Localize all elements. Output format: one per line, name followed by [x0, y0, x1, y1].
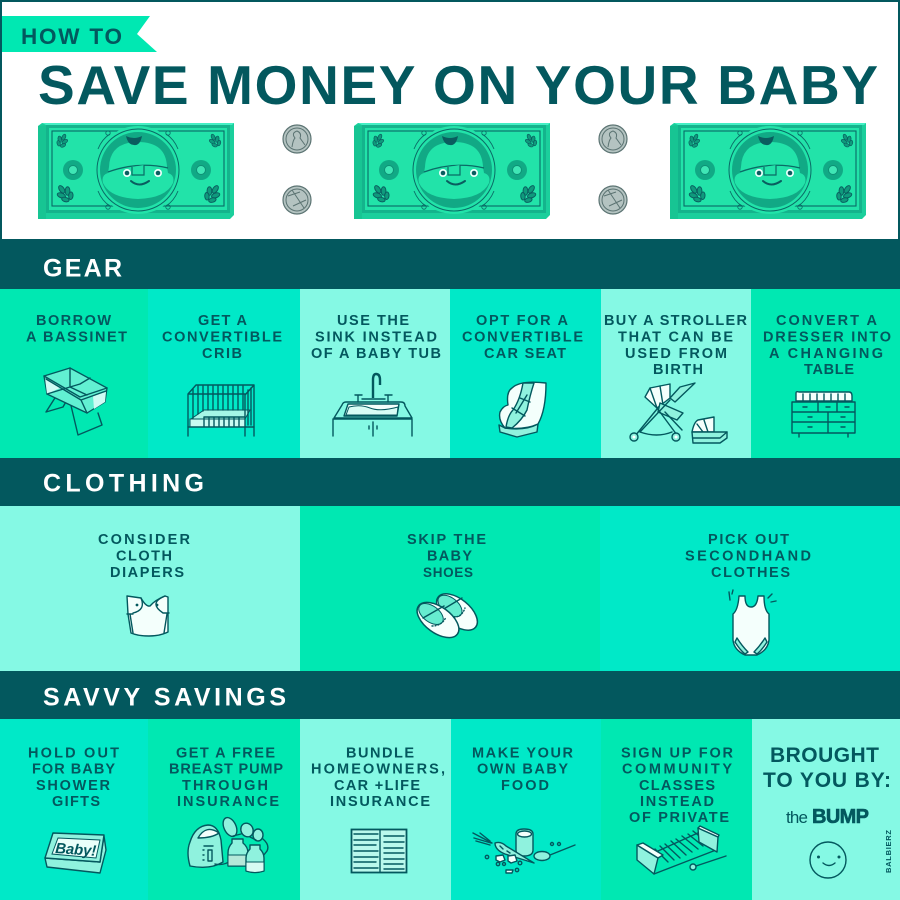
label: skip the baby shoes: BABY: [427, 548, 472, 564]
label: make your own baby food: [472, 746, 574, 794]
label: skip the baby shoes: [407, 532, 486, 580]
panel: stroller: [601, 289, 751, 458]
label: convert a dresser into a changing table: CONVERT A: [776, 313, 878, 329]
icon: coin 2: [283, 186, 311, 214]
label: borrow a bassinet: [26, 313, 127, 346]
label: hold out for baby shower gifts: [28, 746, 119, 810]
panel: dresser changing table: [751, 289, 900, 458]
section band: gear: [0, 239, 900, 289]
icon: crib: [188, 385, 254, 436]
label: bundle homeowners, car + life insurance: HOMEOWNERS,: [311, 762, 445, 778]
label: sign up for community classes instead of private: SIGN UP FOR: [621, 746, 734, 762]
label: hold out for baby shower gifts: HOLD OUT: [28, 746, 119, 762]
label: buy a stroller that can be used from birth: BIRTH: [653, 362, 703, 378]
label: buy a stroller that can be used from birth: [604, 313, 748, 378]
label: buy a stroller that can be used from birth: THAT CAN BE: [618, 330, 733, 346]
section band: savvy savings: SAVVY SAVINGS: [43, 684, 286, 712]
label: get a free breast pump through insurance: BREAST PUMP: [169, 762, 283, 778]
panel: secondhand clothes: [600, 506, 900, 671]
label: sign up for community classes instead of private: COMMUNITY: [622, 762, 732, 778]
icon: stroller and bassinet: [630, 383, 727, 443]
panel: free breast pump: [148, 719, 300, 900]
label: sign up for community classes instead of private: OF PRIVATE: [629, 810, 729, 826]
icon: smiley: [810, 842, 846, 878]
icon: baby shoes: [411, 587, 484, 645]
panel: baby shower gifts: [0, 719, 148, 900]
label: bundle homeowners, car + life insurance: CAR +LIFE: [334, 778, 420, 794]
label: hold out for baby shower gifts: FOR BABY: [32, 762, 115, 778]
artist signature: BALBIERZ: [884, 830, 893, 873]
label: use the sink instead of a baby tub: [311, 313, 441, 362]
label: borrow a bassinet: BORROW: [36, 313, 111, 329]
label: hold out for baby shower gifts: SHOWER: [36, 778, 111, 794]
label: skip the baby shoes: SKIP THE: [407, 532, 486, 548]
heading: brought to you by: TO YOU BY:: [763, 769, 891, 792]
heading: brought to you by: [763, 744, 891, 792]
label: convert a dresser into a changing table: DRESSER INTO: [763, 330, 891, 346]
icon: insurance booklet: [352, 830, 406, 872]
label: bundle homeowners, car + life insurance: BUNDLE: [346, 746, 414, 762]
logo: the bump: [786, 806, 869, 828]
panel: homemade baby food: [451, 719, 601, 900]
label: buy a stroller that can be used from birth: BUY A STROLLER: [604, 313, 748, 329]
icon: baby dollar bill 2: [354, 123, 550, 219]
label: use the sink instead of a baby tub: OF A BABY TUB: [311, 346, 441, 362]
label: use the sink instead of a baby tub: USE THE: [337, 313, 409, 329]
icon: baby cake: [45, 833, 106, 873]
icon: bassinet: [44, 368, 107, 435]
panel: convertible car seat: [450, 289, 601, 458]
label: convert a dresser into a changing table: A CHANGING: [769, 346, 883, 362]
label: get a free breast pump through insurance: THROUGH: [182, 778, 268, 794]
label: consider cloth diapers: CONSIDER: [98, 532, 191, 548]
label: get a convertible crib: CRIB: [202, 346, 242, 362]
section band: clothing: [0, 458, 900, 506]
label: pick out secondhand clothes: PICK OUT: [708, 532, 789, 548]
label: opt for a convertible car seat: CONVERTIBLE: [462, 330, 583, 346]
label: opt for a convertible car seat: CAR SEAT: [484, 346, 566, 362]
label: use the sink instead of a baby tub: SINK INSTEAD: [315, 330, 437, 346]
label: opt for a convertible car seat: OPT FOR A: [476, 313, 569, 329]
section band: savvy savings: [0, 671, 900, 719]
label: bundle homeowners, car + life insurance: [311, 746, 445, 810]
label: borrow a bassinet: A BASSINET: [26, 330, 127, 346]
header panel: [0, 0, 900, 240]
label: get a convertible crib: [162, 313, 282, 362]
label: bundle homeowners, car + life insurance: INSURANCE: [330, 794, 430, 810]
label: make your own baby food: OWN BABY: [477, 762, 568, 778]
panel: community classes: [601, 719, 752, 900]
label: convert a dresser into a changing table: TABLE: [804, 362, 854, 378]
ribbon: how to: [2, 16, 157, 52]
title: SAVE MONEY ON YOUR BABY: [38, 54, 878, 116]
section band: gear: GEAR: [43, 254, 122, 282]
label: consider cloth diapers: DIAPERS: [110, 565, 184, 581]
heading: brought to you by: BROUGHT: [770, 744, 879, 767]
label: convert a dresser into a changing table: [763, 313, 891, 378]
icon: sink: [333, 374, 412, 436]
logo: the bump: the: [786, 808, 808, 827]
icon: coin 3: [599, 125, 627, 153]
panel: sink instead of tub: [300, 289, 450, 458]
ribbon: how to: HOW TO: [21, 24, 122, 49]
label: get a free breast pump through insurance: GET A FREE: [176, 746, 275, 762]
label: sign up for community classes instead of private: CLASSES: [639, 778, 715, 794]
label: sign up for community classes instead of private: [621, 746, 734, 826]
label: make your own baby food: FOOD: [501, 778, 549, 794]
label: get a free breast pump through insurance: [169, 746, 283, 810]
label: buy a stroller that can be used from birth: USED FROM: [625, 346, 727, 362]
label: consider cloth diapers: [98, 532, 191, 581]
icon: baby dollar bill 1: [38, 123, 234, 219]
label: get a convertible crib: CONVERTIBLE: [162, 330, 282, 346]
icon: carrot, jar and spoon: [473, 829, 575, 873]
logo: the bump: BUMP: [812, 806, 869, 828]
icon: car seat: [499, 382, 546, 437]
label: pick out secondhand clothes: SECONDHAND: [685, 548, 811, 564]
section band: clothing: CLOTHING: [43, 470, 204, 498]
icon: baby dollar bill 3: [670, 123, 866, 219]
label: skip the baby shoes: SHOES: [423, 565, 473, 580]
panel: bundle insurance: [300, 719, 451, 900]
icon: xylophone: [637, 826, 726, 874]
icon: dresser: [792, 392, 855, 437]
panel: skip baby shoes: [300, 506, 600, 671]
label: pick out secondhand clothes: CLOTHES: [711, 565, 790, 581]
icon: breast pump: [188, 815, 268, 872]
panel: brought to you by: [752, 719, 900, 900]
icon: cloth diaper: [127, 596, 169, 636]
label: consider cloth diapers: CLOTH: [116, 548, 172, 564]
label: pick out secondhand clothes: [685, 532, 811, 581]
panel: convertible crib: [148, 289, 300, 458]
label: make your own baby food: MAKE YOUR: [472, 746, 574, 762]
label: opt for a convertible car seat: [462, 313, 583, 362]
label: sign up for community classes instead of private: INSTEAD: [640, 794, 714, 810]
icon: onesie: [729, 590, 776, 655]
panel: cloth diapers: [0, 506, 300, 671]
icon: coin 4: [599, 186, 627, 214]
panel: borrow a bassinet: [0, 289, 148, 458]
label: get a convertible crib: GET A: [198, 313, 248, 329]
label: get a free breast pump through insurance: INSURANCE: [177, 794, 279, 810]
cake lettering: Baby!: [55, 840, 97, 860]
label: hold out for baby shower gifts: GIFTS: [52, 794, 100, 810]
icon: coin 1: [283, 125, 311, 153]
